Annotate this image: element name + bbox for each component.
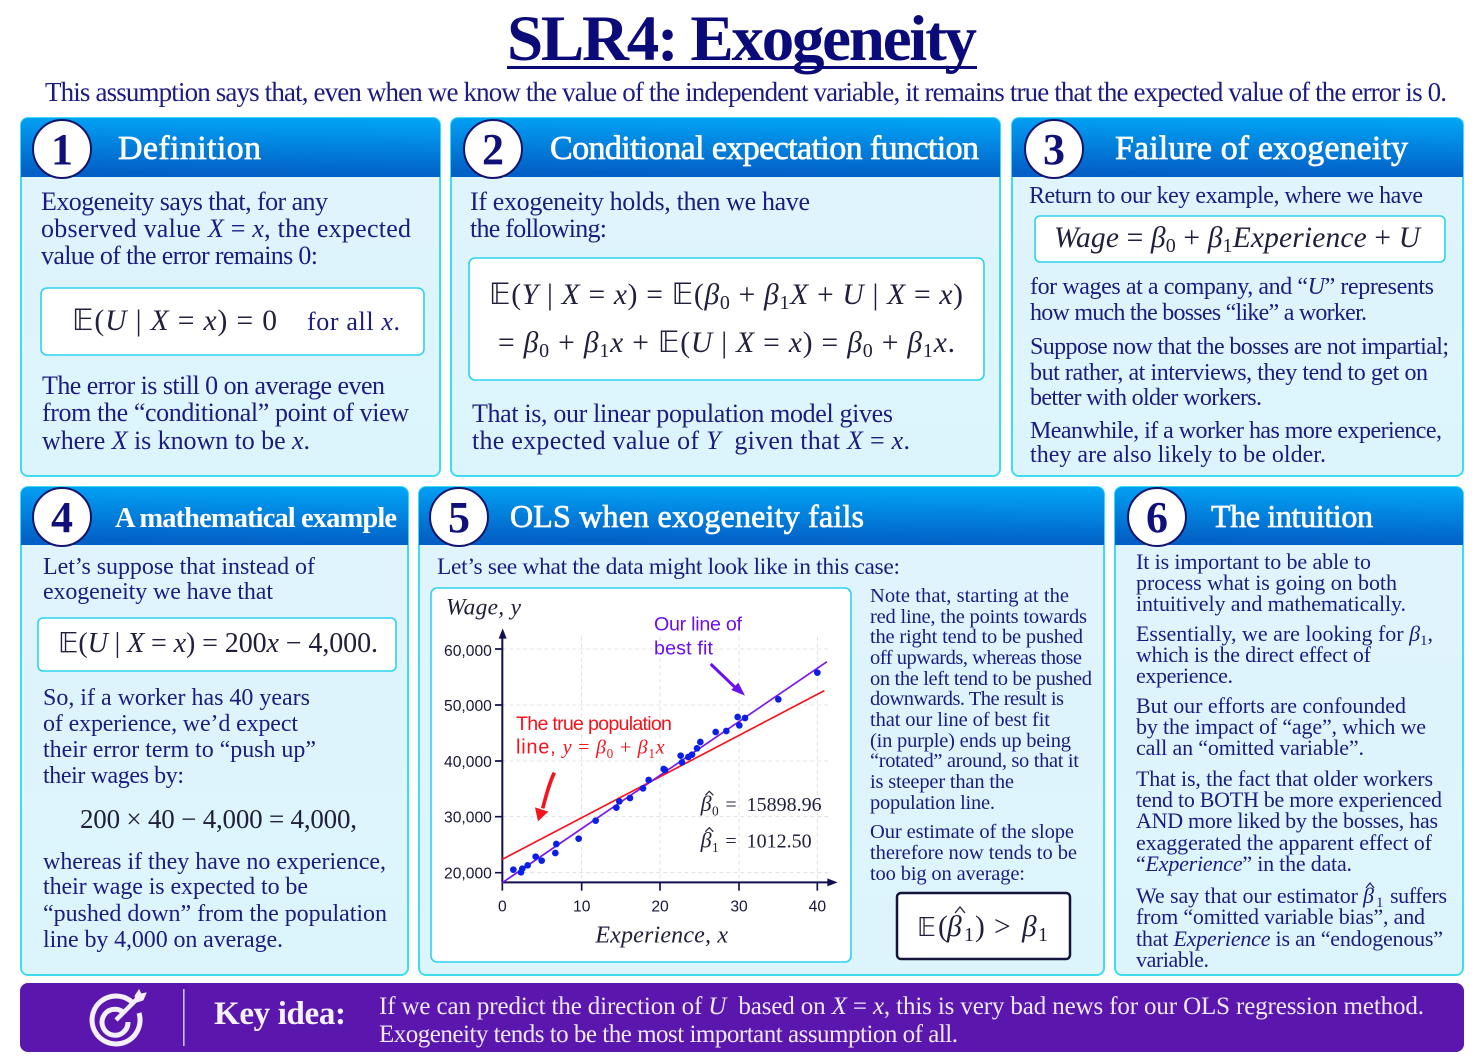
label: true population line: line, y = β	[516, 736, 606, 758]
side commentary: on the left tend to be pushed	[870, 668, 1092, 690]
regression estimates: 15898.96	[747, 794, 822, 816]
intuition text: experience.	[1136, 663, 1233, 688]
axis tick labels: 0	[498, 898, 507, 915]
intuition text: That is, the fact that older workers	[1136, 766, 1433, 791]
intuition text: Essentially, we are looking for β	[1136, 621, 1420, 646]
intro text: Exogeneity says that, for any	[41, 187, 328, 216]
equation box: x	[609, 327, 623, 359]
regression estimates: 1012.50	[747, 830, 812, 852]
intuition text	[1136, 549, 1447, 972]
side commentary: Our estimate of the slope	[870, 821, 1074, 843]
result box	[897, 893, 1070, 959]
equation box: X	[789, 279, 809, 311]
regression estimates	[700, 791, 822, 855]
side commentary: downwards. The result is	[870, 688, 1064, 710]
panel 5: OLS when exogeneity fails	[419, 487, 1104, 975]
number badge 4: 4	[51, 493, 73, 542]
closing text: their wage is expected to be	[43, 874, 308, 900]
intro text: Let’s see what the data might look like in this case:	[437, 554, 900, 580]
explanatory text	[472, 399, 910, 455]
side commentary: (in purple) ends up being	[870, 730, 1071, 752]
equation box: 0	[863, 340, 873, 362]
heading: conditional expectation function: Conditional expectation function	[550, 130, 979, 167]
side commentary	[870, 585, 1092, 885]
closing text: whereas if they have no experience,	[43, 849, 386, 875]
intro text: If exogeneity holds, then we have	[470, 187, 810, 216]
axis tick labels: 40	[809, 898, 826, 915]
heading: definition: Definition	[118, 130, 261, 167]
axis tick labels: 30,000	[444, 810, 492, 827]
number badge 2	[464, 120, 522, 178]
equation box: +	[1176, 222, 1208, 254]
explanatory text: Suppose now that the bosses are not impartial;	[1030, 334, 1449, 360]
equation box: 0	[720, 292, 730, 314]
arrow: to population line	[535, 773, 554, 821]
regression estimates: β	[700, 791, 712, 816]
equation box: 1	[1223, 235, 1233, 257]
intro text: exogeneity we have that	[43, 579, 273, 605]
number badge 4	[33, 488, 91, 546]
explanatory text: how much the bosses “like” a worker.	[1030, 300, 1367, 326]
side commentary: population line.	[870, 792, 995, 814]
heading: failure of exogeneity: Failure of exogeneity	[1115, 130, 1408, 167]
intuition text: intuitively and mathematically.	[1136, 591, 1406, 616]
worked explanation: of experience, we’d expect	[43, 711, 298, 737]
axis title: wage: Wage, y	[446, 594, 522, 620]
axis tick labels: 40,000	[444, 754, 492, 771]
intro text: Return to our key example, where we have	[1029, 183, 1423, 209]
side commentary: that our line of best fit	[870, 709, 1050, 731]
intuition text: 1	[1420, 633, 1428, 649]
equation box: 𝔼(U | X = x) = 0	[72, 303, 277, 337]
result box: )	[975, 911, 985, 943]
equation box: .	[948, 327, 955, 359]
number badge 3: 3	[1043, 125, 1065, 174]
axis tick labels: 30	[730, 898, 748, 915]
worked explanation	[43, 685, 316, 789]
regression estimates: =	[725, 830, 737, 852]
equation box: β	[763, 279, 779, 311]
intuition text: exaggerated the apparent effect of	[1136, 830, 1433, 855]
title: SLR4: Exogeneity	[507, 3, 977, 75]
key idea label: Key idea:	[214, 996, 346, 1032]
heading: the intuition: The intuition	[1211, 498, 1373, 534]
equation box	[38, 618, 396, 671]
number badge 3	[1025, 120, 1083, 178]
equation box	[1035, 216, 1445, 262]
worked explanation: So, if a worker has 40 years	[43, 685, 310, 711]
worked explanation: their error term to “push up”	[43, 737, 316, 763]
result box: 𝔼	[917, 913, 936, 943]
panel 4: a mathematical example	[21, 487, 408, 975]
line of best fit	[502, 662, 827, 883]
explanatory text: That is, our linear population model gives	[472, 399, 893, 428]
result box: 1	[1038, 924, 1048, 946]
equation box: 0	[1166, 235, 1176, 257]
explanatory text: the expected value of Y given that X = x.	[472, 426, 910, 455]
panel 6: the intuition	[1115, 487, 1463, 975]
panel 1: definition	[21, 118, 440, 476]
explanatory text: The error is still 0 on average even	[42, 371, 385, 400]
equation box: = β	[498, 327, 538, 359]
intuition text: “Experience” in the data.	[1136, 851, 1352, 876]
intro text: observed value X = x, the expected	[41, 214, 411, 243]
closing text: “pushed down” from the population	[43, 901, 387, 927]
side commentary: Note that, starting at the	[870, 585, 1069, 607]
intuition text: β	[1362, 883, 1374, 908]
regression estimates: 0	[712, 804, 719, 819]
equation box: β	[583, 327, 599, 359]
axis tick labels: 10	[573, 898, 591, 915]
number badge 6	[1128, 488, 1186, 546]
explanatory text: for wages at a company, and “U” represents	[1030, 274, 1434, 300]
intuition text: which is the direct effect of	[1136, 642, 1372, 667]
label: line of best fit	[654, 614, 743, 660]
explanatory text: from the “conditional” point of view	[42, 398, 409, 427]
intro text: value of the error remains 0:	[41, 241, 318, 270]
explanatory text	[1030, 274, 1449, 468]
equation box: 0	[539, 340, 549, 362]
intuition text: ,	[1428, 621, 1433, 646]
axis tick labels	[444, 643, 826, 915]
side commentary: “rotated” around, so that it	[870, 750, 1079, 772]
side commentary: the right tend to be pushed	[870, 626, 1083, 648]
number badge 1: 1	[51, 125, 73, 174]
result box: β	[946, 911, 962, 943]
equation box: Wage = β	[1054, 222, 1166, 254]
explanatory text: better with older workers.	[1030, 385, 1262, 411]
x axis	[502, 878, 838, 891]
equation box	[469, 258, 984, 380]
label: line of best fit: best fit	[654, 638, 714, 660]
number badge 2: 2	[482, 125, 504, 174]
equation box: x	[933, 327, 947, 359]
intuition text: variable.	[1136, 947, 1209, 972]
number badge 1	[33, 120, 91, 178]
result box: >	[994, 911, 1011, 943]
result box: (	[938, 911, 948, 943]
label: true population line: β	[637, 736, 648, 758]
closing text	[43, 849, 387, 953]
equation box: 1	[779, 292, 789, 314]
equation box: 𝔼(Y | X = x) = 𝔼(β	[489, 277, 719, 311]
intuition text: call an “omitted variable”.	[1136, 735, 1364, 760]
label: true population line: 1	[648, 746, 655, 761]
intro text	[43, 554, 315, 605]
heading: a mathematical example: A mathematical example	[115, 503, 397, 534]
regression estimates: =	[725, 794, 737, 816]
equation box	[41, 288, 424, 355]
equation box: +	[731, 279, 763, 311]
regression estimates: 1	[712, 840, 719, 855]
y axis	[495, 628, 507, 882]
intuition text: But our efforts are confounded	[1136, 693, 1406, 718]
side commentary: red line, the points towards	[870, 606, 1087, 628]
label: line of best fit: Our line of	[654, 614, 743, 636]
axis tick labels: 20,000	[444, 866, 492, 883]
key idea text	[379, 993, 1424, 1048]
true population line	[502, 691, 824, 859]
key idea text: Exogeneity tends to be the most important assumption of all.	[379, 1021, 958, 1048]
intro text: the following:	[470, 214, 607, 243]
label: true population line: The true population	[516, 713, 672, 735]
equation box: + U | X = x)	[817, 279, 963, 311]
key idea banner	[20, 983, 1464, 1052]
arrow: to line of best fit	[711, 664, 745, 696]
intuition text: tend to BOTH be more experienced	[1136, 787, 1442, 812]
number badge 5	[430, 488, 488, 546]
subtitle: This assumption says that, even when we know the value of the independent variable, it remains true that the expected value of the error is 0.	[45, 77, 1447, 107]
equation box: +	[874, 327, 907, 359]
side commentary: off upwards, whereas those	[870, 647, 1082, 669]
result box: 1	[964, 924, 974, 946]
intro text: Let’s suppose that instead of	[43, 554, 315, 580]
heading: OLS when exogeneity fails: OLS when exogeneity fails	[510, 498, 864, 534]
label: true population line: x	[655, 736, 665, 758]
side commentary: is steeper than the	[870, 771, 1014, 793]
intuition text: 1	[1376, 895, 1384, 911]
intuition text: that Experience is an “endogenous”	[1136, 926, 1443, 951]
equation box: 1	[599, 340, 609, 362]
axis title: experience: Experience, x	[594, 923, 728, 949]
equation box: 1	[923, 340, 933, 362]
intuition text: suffers	[1390, 883, 1447, 908]
explanatory text: where X is known to be x.	[42, 426, 310, 455]
icon: target with arrow	[92, 990, 146, 1044]
axis tick labels: 60,000	[444, 643, 492, 660]
equation box: +	[550, 327, 583, 359]
label: true population line: 0	[607, 746, 614, 761]
data points	[510, 669, 821, 876]
intro text	[470, 187, 810, 243]
equation box: 𝔼(U | X = x) = 200x − 4,000.	[58, 626, 378, 659]
panel 2: conditional expectation function	[451, 118, 1000, 476]
intuition text: process what is going on both	[1136, 570, 1397, 595]
result box: β	[1021, 911, 1037, 943]
key idea text: If we can predict the direction of U based on X = x, this is very bad news for our OLS regression method.	[379, 993, 1424, 1020]
intro text	[41, 187, 411, 270]
label: true population line: +	[614, 736, 637, 758]
intuition text: We say that our estimator	[1136, 883, 1359, 908]
explanatory text: Meanwhile, if a worker has more experience,	[1030, 418, 1442, 444]
worked explanation: their wages by:	[43, 763, 184, 789]
label: true population line	[516, 713, 672, 761]
explanatory text: but rather, at interviews, they tend to get on	[1030, 360, 1428, 386]
axis tick labels: 50,000	[444, 698, 492, 715]
explanatory text	[42, 371, 409, 455]
scatter chart panel	[431, 588, 851, 962]
regression estimates: β	[700, 827, 712, 852]
intuition text: It is important to be able to	[1136, 549, 1371, 574]
panel 3: failure of exogeneity	[1012, 118, 1463, 476]
equation box: + U	[1374, 222, 1420, 254]
number badge 6: 6	[1146, 493, 1168, 542]
equation box: β	[1207, 222, 1223, 254]
equation box: β	[906, 327, 922, 359]
axis tick labels: 20	[651, 898, 669, 915]
equation box: for all x.	[307, 307, 400, 336]
equation box: Experience	[1232, 222, 1367, 254]
closing text: line by 4,000 on average.	[43, 927, 283, 953]
intuition text: AND more liked by the bosses, has	[1136, 808, 1438, 833]
gridlines	[502, 637, 828, 882]
intuition text: by the impact of “age”, which we	[1136, 714, 1426, 739]
side commentary: therefore now tends to be	[870, 842, 1077, 864]
worked calculation: 200 × 40 − 4,000 = 4,000,	[80, 804, 357, 834]
side commentary: too big on average:	[870, 863, 1025, 885]
number badge 5: 5	[448, 493, 470, 542]
equation box: + 𝔼(U | X = x) = β	[632, 325, 862, 359]
intuition text: from “omitted variable bias”, and	[1136, 904, 1425, 929]
explanatory text: they are also likely to be older.	[1030, 442, 1326, 468]
